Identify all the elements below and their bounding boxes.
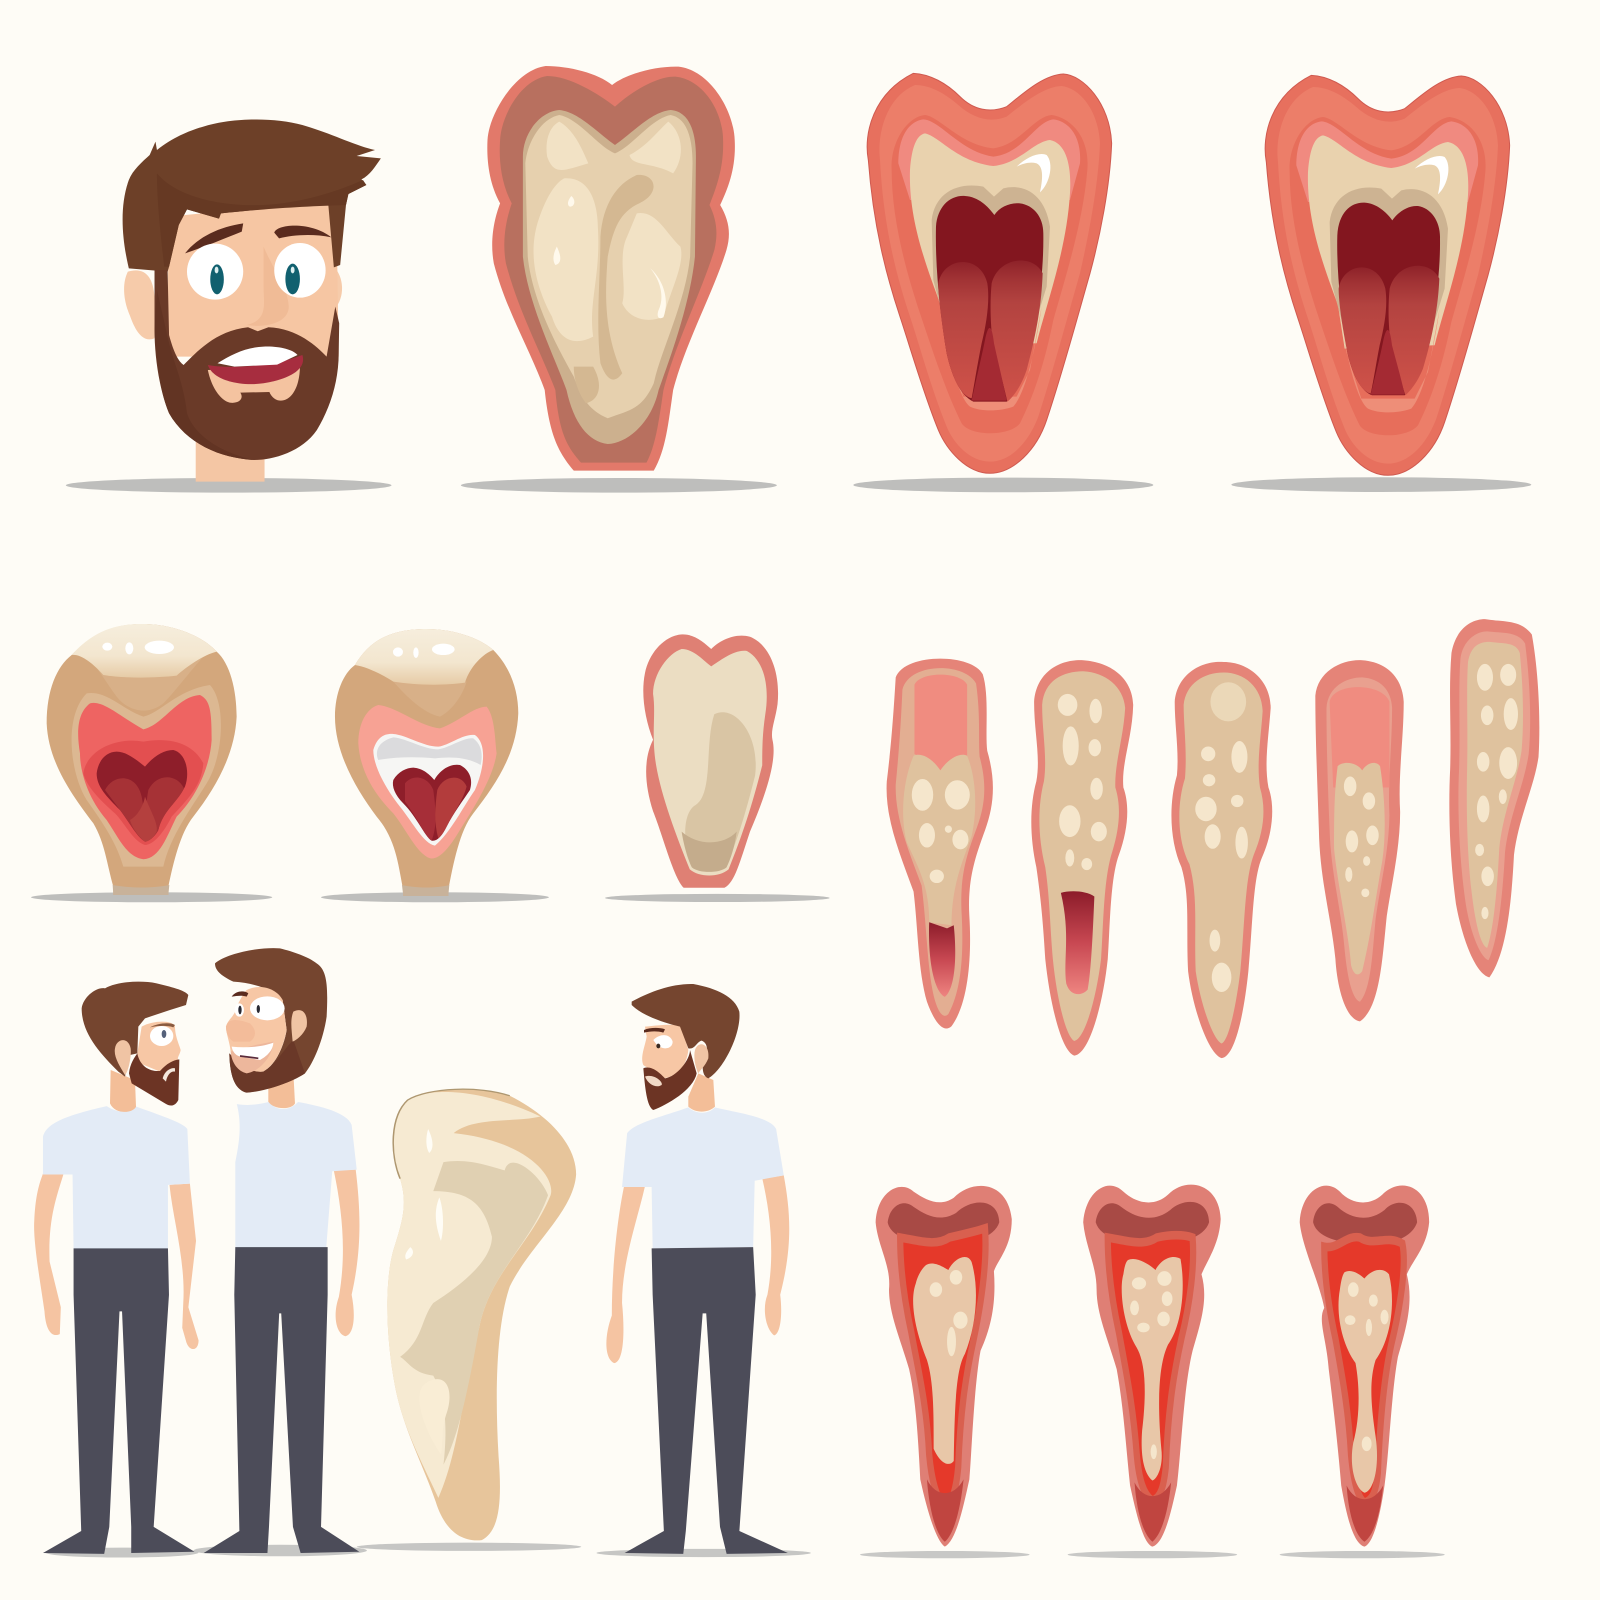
hair shading: [157, 173, 366, 267]
crown body: [335, 629, 518, 896]
beard: [155, 270, 339, 460]
dentin shade: [932, 186, 1050, 330]
narrow tooth three: [1171, 662, 1272, 1058]
lighter enamel band: [879, 85, 1100, 462]
right pulp fold: [1389, 266, 1439, 395]
dark veins: [574, 175, 654, 403]
ground shadows under figures: [46, 1543, 811, 1558]
pulp centre: [130, 797, 157, 842]
gum ring below cavity: [1338, 302, 1440, 412]
central pulp slit: [972, 328, 1007, 401]
pulp cavity: [1337, 203, 1440, 395]
cream patches: [534, 122, 681, 341]
neck shade: [85, 653, 207, 711]
narrow tooth five: [1449, 619, 1539, 977]
crown base: [113, 885, 169, 895]
right eye: [274, 243, 326, 298]
chin skin: [208, 367, 300, 403]
tooth shadow: [853, 478, 1153, 492]
plaque layer: [525, 115, 693, 418]
tooth cream face: [387, 1092, 551, 1498]
lighter enamel band: [1277, 87, 1498, 464]
pulp folds: [105, 777, 184, 842]
man one, facing right: [34, 982, 199, 1554]
neck: [196, 440, 265, 482]
tan veins: [400, 1161, 548, 1465]
gum ring below cavity: [940, 300, 1042, 410]
red inflamed area: [78, 695, 212, 859]
small plaque tooth: [605, 634, 830, 902]
body: [606, 1107, 789, 1554]
head illustration: [66, 119, 392, 493]
dentin: [910, 133, 1070, 347]
outer enamel: [1265, 75, 1510, 475]
white lining: [373, 734, 483, 846]
body: [204, 1102, 359, 1553]
beard shading: [155, 290, 254, 460]
crown with white lining: [321, 629, 549, 902]
shading: [685, 712, 756, 871]
right pulp fold: [991, 260, 1043, 402]
narrow tooth four: [1315, 660, 1404, 1021]
left eye: [187, 244, 243, 300]
pink ring: [358, 705, 497, 858]
enamel: [643, 634, 778, 888]
left pulp fold: [1339, 267, 1386, 394]
tooth shadow: [1231, 477, 1531, 492]
inner lighter band: [72, 685, 221, 867]
outer enamel: [867, 73, 1112, 473]
man three, facing left: [606, 984, 789, 1554]
crown body: [47, 624, 237, 895]
darker red ring: [83, 740, 203, 845]
gloss: [1017, 154, 1050, 192]
tooth shadow: [461, 478, 777, 493]
inflamed tooth two: [1068, 1185, 1237, 1558]
cream cap: [72, 624, 217, 678]
dentin: [523, 110, 696, 444]
hair: [123, 119, 381, 272]
dark inner layer: [500, 76, 723, 463]
head: [215, 948, 327, 1108]
tooth: plaque filled crown: [461, 66, 777, 493]
tooth side: [387, 1089, 576, 1540]
cap highlights: [393, 644, 455, 658]
outer enamel: [487, 66, 735, 471]
crown mid tone: [393, 682, 467, 717]
dentin: [1308, 135, 1468, 349]
grey lining: [377, 737, 482, 765]
inflamed tooth one: [860, 1186, 1030, 1558]
pulp cavity: [936, 196, 1043, 402]
crown with red pulp: [31, 624, 272, 902]
pulp right fold: [435, 778, 467, 838]
pulp heart: [97, 750, 187, 842]
base shade: [682, 832, 737, 872]
ear: [124, 270, 155, 339]
tall cream tooth: [387, 1089, 576, 1540]
man two, facing left: [204, 948, 359, 1553]
rim stroke: [393, 1089, 510, 1179]
left pulp fold: [938, 262, 988, 398]
shadow: [321, 892, 549, 902]
pink gum band: [1296, 121, 1478, 202]
narrow tooth two: [1031, 660, 1133, 1056]
eyebrows: [185, 223, 331, 253]
crown base: [402, 885, 449, 896]
inflamed tooth three: [1280, 1185, 1445, 1558]
nose: [247, 247, 289, 326]
head shadow: [66, 478, 392, 493]
shadow: [31, 892, 272, 902]
cream cap: [355, 629, 493, 685]
dark gum ring: [1290, 117, 1486, 435]
head: [82, 982, 188, 1112]
dentin: [653, 649, 767, 876]
highlights: [553, 196, 666, 318]
shadow: [605, 894, 830, 902]
mouth: [208, 347, 303, 384]
narrow tooth one: [887, 659, 993, 1029]
right ear: [334, 267, 342, 310]
pulp folds: [405, 778, 436, 841]
cream patch: [419, 1379, 450, 1454]
pink gum band: [898, 119, 1080, 200]
tooth: open cavity, version two: [1231, 75, 1531, 492]
tooth: open cavity, version one: [853, 73, 1153, 492]
head: [632, 984, 740, 1112]
cap highlights: [102, 641, 174, 654]
body: [34, 1106, 199, 1554]
highlights: [405, 1129, 443, 1260]
face skin: [167, 200, 339, 357]
pulp: [393, 765, 471, 841]
gloss: [1415, 156, 1448, 194]
dark gum ring: [892, 115, 1088, 433]
central pulp slit: [1371, 330, 1405, 395]
inflamed teeth row: [860, 1185, 1445, 1558]
dentin shade: [1330, 188, 1448, 332]
narrow teeth row: [887, 619, 1539, 1058]
